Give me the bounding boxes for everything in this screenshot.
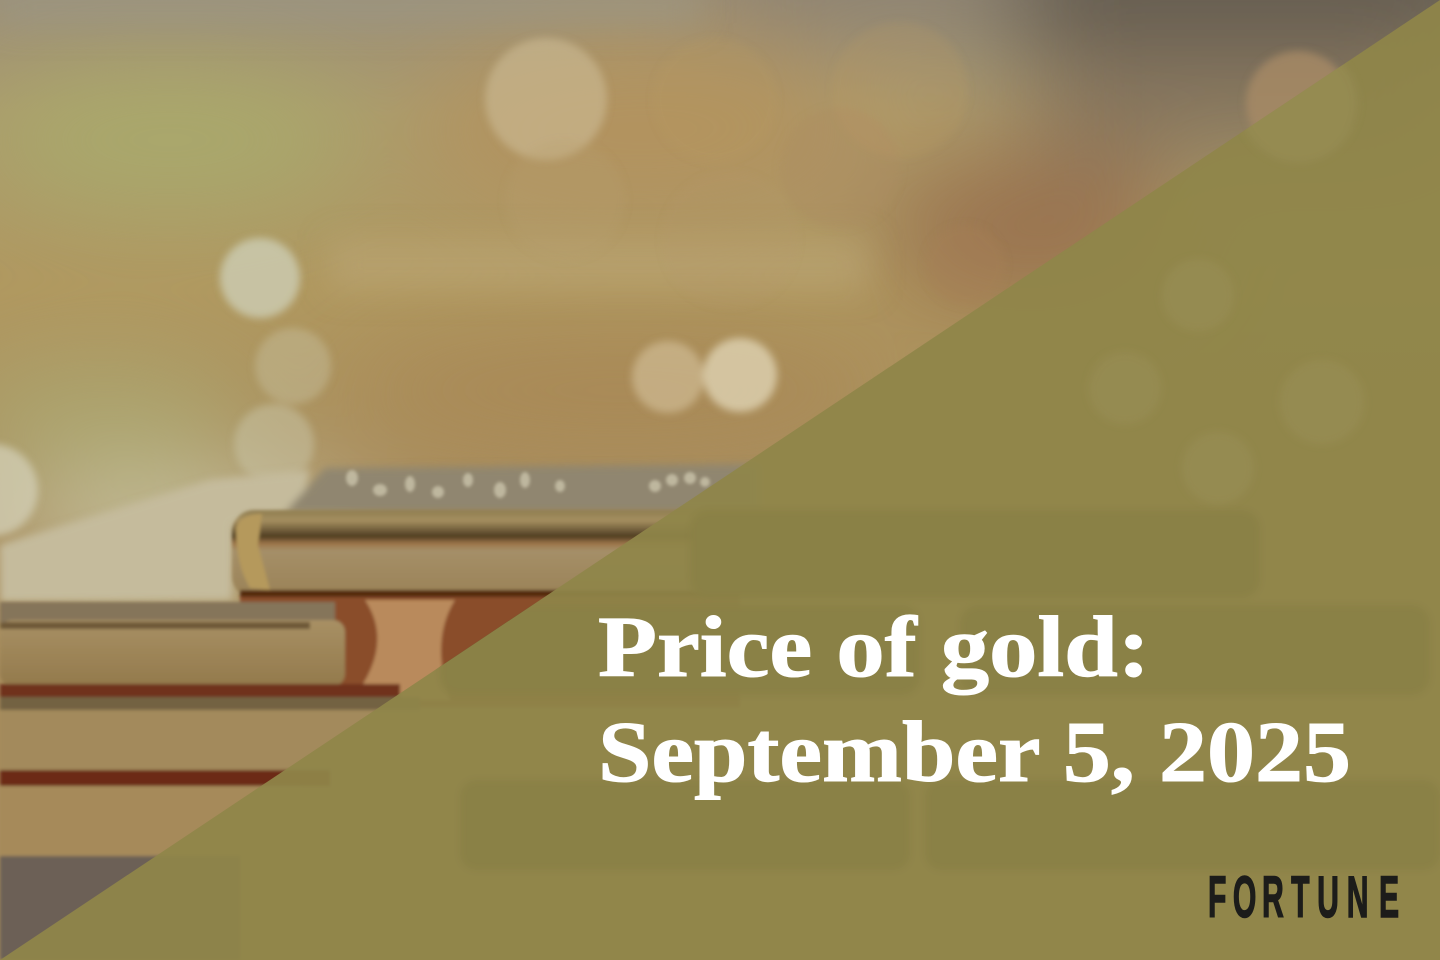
title: Price of gold: [598,598,1150,695]
faint bars under the overlay [439,606,531,668]
title: September 5, 2025 [598,703,1351,800]
logo: FORTUNE wordmark: FORTUNE [1208,864,1399,930]
gold bars [0,464,760,602]
